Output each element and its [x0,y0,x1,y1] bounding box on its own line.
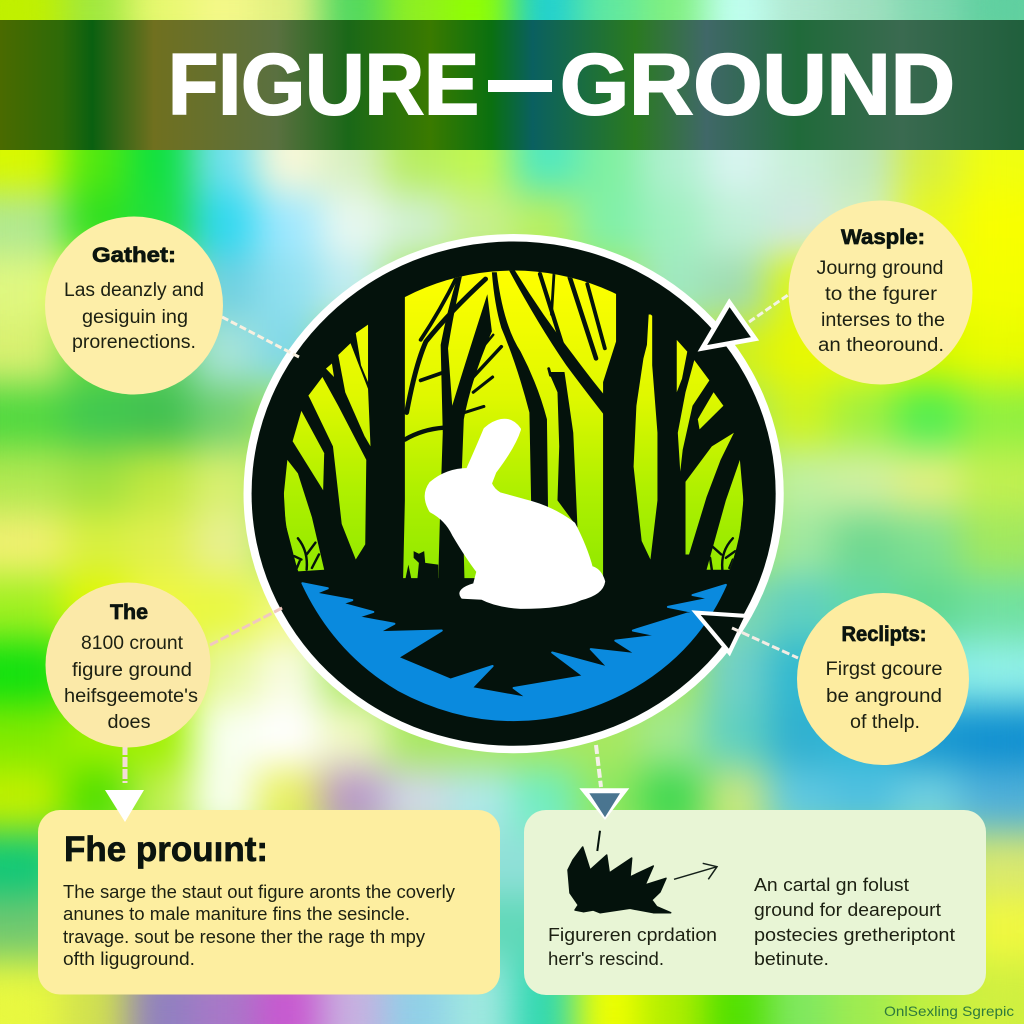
title band [0,20,1024,150]
callout: top left: Gathet: [92,244,176,267]
title: FIGURE [168,37,479,133]
callout: lower left: heifsgeemote's [64,686,198,707]
arrow: figure to ground [674,863,717,879]
callout: lower left: figure ground [72,660,192,681]
callout: top left: gesiguin ing [82,307,188,328]
callout: top right [788,200,972,384]
callout: top left [45,216,223,394]
callout: lower left: 8100 crount [81,633,184,654]
forest window [284,264,743,582]
icon line above silhouette [597,831,600,851]
panel: the prominent: ofth liguground. [63,949,195,969]
panel: figure example: postecies gretheriptont [754,925,955,945]
callout: lower left: does [108,712,150,733]
panel: figure example [524,810,986,995]
callout: lower right [797,593,969,765]
callout: top right: Wasple: [841,226,925,249]
callout: top right: Journg ground [816,258,944,279]
footer credit: OnlSexling Sgrepic [884,1003,1014,1019]
callout: lower right: of thelp. [850,712,920,733]
panel: the prominent: The sarge the staut out figure aronts the coverly [63,882,455,902]
callout: top right: an theoround. [818,335,944,356]
title [168,37,955,133]
callout: top right: to the fgurer [825,284,938,305]
callout: top left: Las deanzly and [64,280,204,301]
panel: figure example: Figureren cprdation [548,925,717,945]
callout: lower left [46,582,210,748]
arrow: upper right pointer [702,303,755,348]
tree trunks and branches [438,267,605,582]
pointer: triangle into right panel [579,788,629,820]
panel: figure example: betinute. [754,949,829,969]
panel: the prominent: travage. sout be resone ther the rage th mpy [63,927,425,947]
panel: the prominent [38,810,500,994]
blue water [302,583,726,720]
small mouse silhouette [406,551,438,578]
panel: the prominent: Fhe prouınt: [64,830,268,869]
icon: spiky figure silhouette [568,847,671,913]
title: GROUND [560,37,955,133]
callout: lower right: Firgst gcoure [826,659,942,680]
panel: figure example: herr's rescind. [548,949,664,969]
arrow: lower right pointer [696,613,747,652]
callout: top right: interses to the [821,310,945,331]
grass tufts [294,538,735,570]
connector lines [125,295,798,787]
pointer: triangle into left panel [105,790,144,822]
panel: the prominent: anunes to male maniture fins the sesincle. [63,904,410,924]
callout: lower left: The [110,601,148,624]
panel: figure example: An cartal gn folust [754,875,909,895]
callout: lower right: Reclipts: [842,623,926,646]
central emblem: forest and rabbit [244,234,784,753]
callout: top left: prorenections. [72,332,196,353]
callout: lower right: be anground [826,686,942,707]
rabbit figure [427,421,603,607]
panel: figure example: ground for dearepourt [754,900,941,920]
